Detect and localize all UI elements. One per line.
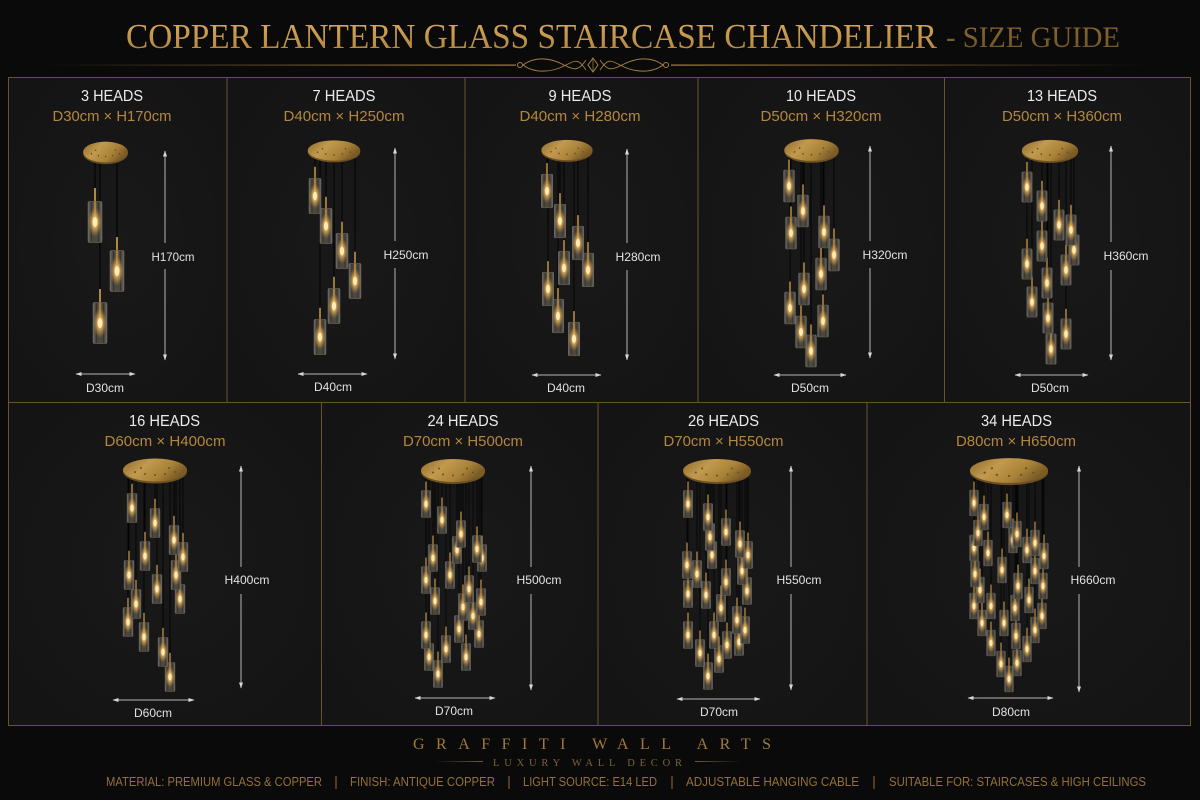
brand tagline: LUXURY WALL DECOR bbox=[493, 758, 682, 769]
dimensions: 26 heads: D70cm × H550cm bbox=[664, 433, 784, 450]
dimensions: 3 heads: D30cm × H170cm bbox=[52, 108, 172, 125]
panel: 10 heads bbox=[698, 77, 944, 402]
height label: 16 heads: H400cm bbox=[224, 573, 270, 587]
specifications footer: ADJUSTABLE HANGING CABLE bbox=[686, 775, 859, 789]
chandelier: 10 heads bbox=[783, 139, 840, 368]
specifications footer: FINISH: ANTIQUE COPPER bbox=[350, 775, 495, 789]
width label: 26 heads: D70cm bbox=[700, 705, 738, 719]
chandelier: 24 heads bbox=[421, 459, 487, 688]
chandelier: 13 heads bbox=[1022, 140, 1080, 364]
height label: 10 heads: H320cm bbox=[862, 248, 908, 262]
panel: 34 heads bbox=[868, 403, 1191, 726]
title: - SIZE GUIDE bbox=[946, 21, 1120, 54]
height arrow: 16 heads bbox=[240, 466, 242, 688]
width arrow: 3 heads bbox=[76, 373, 135, 375]
heading: 3 heads: 3 HEADS bbox=[81, 88, 143, 105]
specifications footer: MATERIAL: PREMIUM GLASS & COPPER bbox=[106, 775, 322, 789]
width label: 7 heads: D40cm bbox=[314, 380, 352, 394]
dimensions: 10 heads: D50cm × H320cm bbox=[760, 108, 882, 125]
width label: 34 heads: D80cm bbox=[992, 705, 1030, 719]
dimensions: 16 heads: D60cm × H400cm bbox=[104, 433, 226, 450]
heading: 7 heads: 7 HEADS bbox=[312, 88, 376, 105]
heading: 26 heads: 26 HEADS bbox=[688, 413, 759, 430]
width arrow: 26 heads bbox=[677, 698, 760, 700]
height arrow: 34 heads bbox=[1078, 466, 1080, 692]
width arrow: 34 heads bbox=[968, 697, 1053, 699]
chandelier: 16 heads bbox=[122, 458, 188, 692]
chandelier: 26 heads bbox=[682, 459, 753, 690]
height arrow: 26 heads bbox=[790, 466, 792, 690]
height label: 7 heads: H250cm bbox=[384, 248, 428, 262]
height arrow: 13 heads bbox=[1110, 146, 1112, 360]
dimensions: 24 heads: D70cm × H500cm bbox=[403, 433, 523, 450]
height label: 13 heads: H360cm bbox=[1104, 249, 1148, 263]
width arrow: 7 heads bbox=[298, 373, 367, 375]
width arrow: 24 heads bbox=[415, 697, 495, 699]
chandelier: 9 heads bbox=[541, 140, 594, 356]
ornamental divider bbox=[40, 58, 1151, 72]
heading: 24 heads: 24 HEADS bbox=[428, 413, 498, 430]
panel: 24 heads bbox=[322, 403, 598, 726]
height label: 26 heads: H550cm bbox=[776, 573, 822, 587]
height label: 34 heads: H660cm bbox=[1070, 573, 1116, 587]
chandelier: 7 heads bbox=[308, 140, 362, 355]
panel: 16 heads bbox=[8, 403, 321, 726]
chandelier: 3 heads bbox=[83, 142, 128, 344]
height label: 3 heads: H170cm bbox=[152, 250, 194, 264]
width arrow: 13 heads bbox=[1015, 374, 1088, 376]
width label: 24 heads: D70cm bbox=[435, 704, 473, 718]
width label: 13 heads: D50cm bbox=[1031, 381, 1069, 395]
dimensions: 34 heads: D80cm × H650cm bbox=[956, 433, 1076, 450]
panel: 26 heads bbox=[598, 403, 866, 726]
heading: 13 heads: 13 HEADS bbox=[1027, 88, 1097, 105]
panel: 3 heads bbox=[8, 77, 226, 402]
dimensions: 9 heads: D40cm × H280cm bbox=[520, 108, 640, 125]
height label: 9 heads: H280cm bbox=[616, 250, 660, 264]
title: COPPER LANTERN GLASS STAIRCASE CHANDELIER bbox=[126, 17, 938, 56]
heading: 10 heads: 10 HEADS bbox=[786, 88, 856, 105]
heading: 34 heads: 34 HEADS bbox=[981, 413, 1052, 430]
dimensions: 7 heads: D40cm × H250cm bbox=[284, 108, 404, 125]
width arrow: 16 heads bbox=[113, 699, 194, 701]
width label: 9 heads: D40cm bbox=[547, 381, 585, 395]
height arrow: 10 heads bbox=[869, 146, 871, 358]
height arrow: 9 heads bbox=[626, 149, 628, 360]
panel: 7 heads bbox=[228, 77, 464, 402]
height arrow: 7 heads bbox=[394, 148, 396, 359]
heading: 16 heads: 16 HEADS bbox=[129, 413, 200, 430]
width arrow: 10 heads bbox=[774, 374, 846, 376]
width label: 16 heads: D60cm bbox=[134, 706, 172, 720]
dimensions: 13 heads: D50cm × H360cm bbox=[1002, 108, 1122, 125]
panel: 9 heads bbox=[466, 77, 698, 402]
specifications footer: SUITABLE FOR: STAIRCASES & HIGH CEILINGS bbox=[889, 775, 1146, 789]
width label: 3 heads: D30cm bbox=[86, 381, 124, 395]
brand name: GRAFFITI WALL ARTS bbox=[413, 736, 771, 753]
specifications footer: LIGHT SOURCE: E14 LED bbox=[523, 775, 657, 789]
height label: 24 heads: H500cm bbox=[516, 573, 562, 587]
panel: 13 heads bbox=[945, 77, 1191, 402]
width label: 10 heads: D50cm bbox=[791, 381, 829, 395]
heading: 9 heads: 9 HEADS bbox=[548, 88, 612, 105]
height arrow: 3 heads bbox=[164, 151, 166, 360]
specifications footer bbox=[106, 775, 1146, 789]
height arrow: 24 heads bbox=[530, 466, 532, 690]
width arrow: 9 heads bbox=[532, 374, 601, 376]
chandelier: 34 heads bbox=[969, 458, 1049, 692]
